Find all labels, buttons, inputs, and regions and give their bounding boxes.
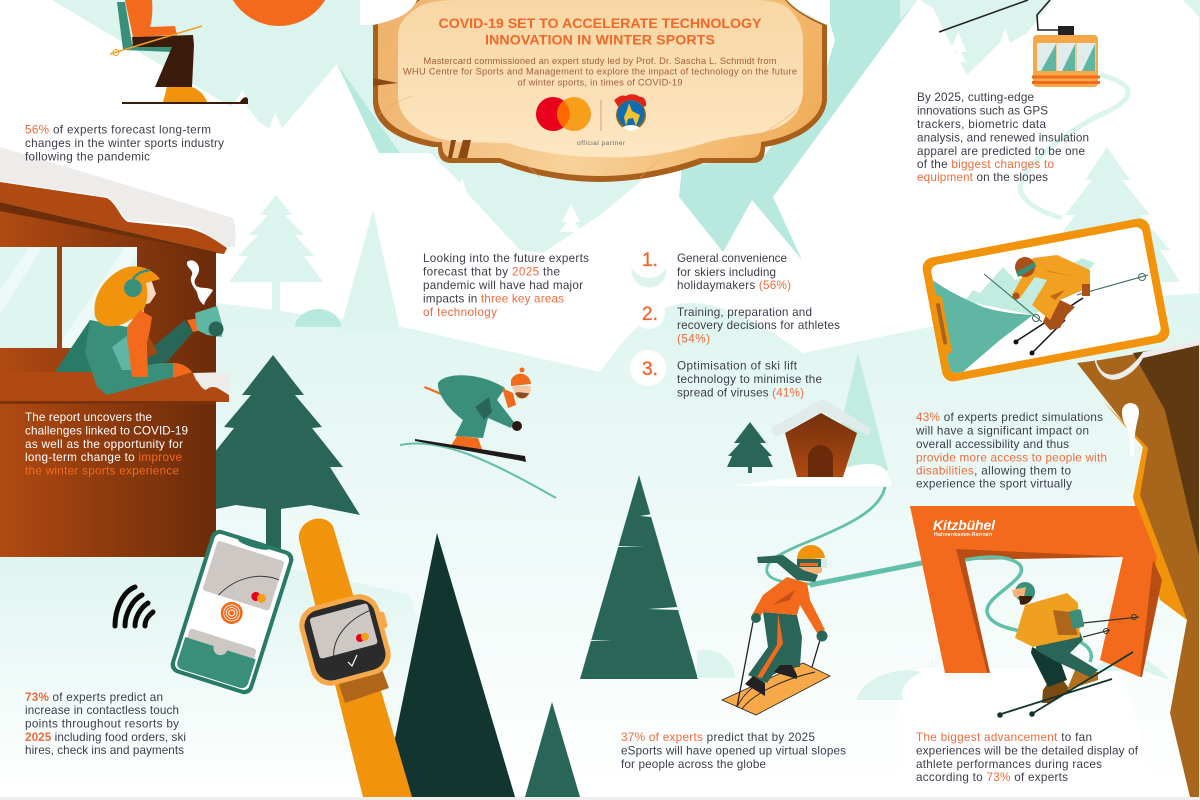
skier in phone: [984, 255, 1148, 356]
ski track upper right: [1020, 75, 1128, 218]
balcony: [0, 372, 230, 404]
start gate: [910, 506, 1162, 677]
dark green cone tree: [580, 475, 698, 679]
item 2: (54%): [677, 332, 710, 346]
item 1: 1.: [642, 250, 658, 271]
ski trails: [767, 487, 922, 585]
text: by 2025 equipment: apparel are predicted to be one: [917, 145, 1085, 158]
plaque intro text: [403, 56, 797, 88]
sun: [225, 0, 333, 26]
text: report uncovers: challenges linked to COVID-19: [25, 424, 188, 438]
text: 73% contactless: hires, check ins and payments: [25, 744, 184, 757]
cabin: [0, 147, 236, 557]
light mint tree upper right: [1030, 147, 1180, 282]
text: looking into the future: impacts in three key areas: [423, 292, 564, 306]
background: mountains: [52, 0, 1200, 335]
big dark pine tree: [383, 533, 515, 797]
item 2: [633, 297, 840, 346]
plaque title: INNOVATION IN WINTER SPORTS: [485, 32, 715, 48]
text: report uncovers: The report uncovers the: [25, 411, 152, 424]
small dark teal tree: [525, 702, 580, 797]
esports skier with VR headset: [722, 545, 830, 715]
text: looking into the future: Looking into the future experts: [423, 252, 589, 265]
title plaque: [360, 0, 830, 182]
plaque title: [438, 16, 762, 48]
item 3: technology to minimise the: [677, 373, 822, 386]
text: 73% contactless: 2025 including food orders, ski: [25, 731, 186, 744]
text: 56% of experts: following the pandemic: [25, 150, 150, 164]
text: report uncovers: long-term change to improve: [25, 451, 182, 464]
text: by 2025 equipment: equipment on the slopes: [917, 171, 1048, 184]
ski trail through gate: [965, 557, 1091, 662]
text: looking into the future: of technology: [423, 306, 497, 319]
text: 37% eSports: 37% of experts predict that by 2025: [621, 731, 815, 744]
item 3: Optimisation of ski lift: [677, 360, 798, 372]
text: biggest advancement: athlete performances during races: [916, 758, 1102, 771]
text: 43% simulations: overall accessibility and thus: [916, 438, 1069, 451]
item 2: Training, preparation and: [677, 306, 812, 319]
woman with mug: [55, 266, 224, 395]
text: looking into the future: [423, 252, 589, 319]
text: 43% simulations: experience the sport virtually: [916, 478, 1072, 490]
numbered list: three key areas: [629, 238, 840, 400]
text: 37% eSports: eSports will have opened up virtual slopes: [621, 744, 846, 758]
item 3: [630, 350, 822, 400]
text: 73% contactless: 73% of experts predict an: [25, 691, 163, 704]
smartphone with payment card: [168, 528, 296, 696]
contactless icon: [115, 587, 153, 626]
text: by 2025 equipment: By 2025, cutting-edge: [917, 91, 1034, 104]
item 2: recovery decisions for athletes: [677, 319, 840, 332]
plaque intro text: of winter sports, in times of COVID-19: [518, 78, 682, 88]
text: 73% contactless: [25, 691, 186, 757]
Mastercard logo: [536, 97, 591, 131]
steam: [187, 260, 213, 305]
brown rock cliff: [1077, 340, 1200, 797]
cable car: [939, 0, 1100, 87]
Kitzbuhel logo: Kitzbühel: [933, 517, 996, 533]
text: 43% simulations: will have a significant impact on: [915, 424, 1089, 438]
plaque intro text: WHU Centre for Sports and Management to explore the impact of technology on the future: [403, 66, 797, 76]
text: 73% contactless: points throughout resorts by: [25, 718, 179, 730]
text: 73% contactless: increase in contactless touch: [25, 704, 179, 717]
text: biggest advancement: [916, 731, 1139, 784]
text: biggest advancement: according to 73% of experts: [916, 771, 1068, 784]
text: 43% simulations: [915, 411, 1107, 490]
Kitzbuhel logo: Hahnenkamm-Rennen: [934, 532, 992, 538]
small pine tree: [727, 422, 773, 473]
cabin windows: [0, 247, 137, 348]
snow mound and hut: [735, 400, 892, 486]
fingerprint button: [218, 599, 246, 627]
text: 56% of experts: [25, 124, 224, 164]
ski club badge: [614, 94, 646, 131]
gate skier: [997, 582, 1139, 718]
text: 43% simulations: disabilities, allowing them to: [916, 464, 1071, 478]
light mint tree behind cabin: [229, 195, 323, 312]
text: 56% of experts: 56% of experts forecast long-term: [25, 124, 211, 136]
text: 37% eSports: for people across the globe: [621, 758, 766, 771]
smartwatch: [295, 519, 412, 797]
item 1: holidaymakers (56%): [677, 279, 791, 292]
official partner label: official partner: [577, 140, 626, 147]
text: by 2025 equipment: innovations such as GPS: [917, 104, 1048, 118]
text: by 2025 equipment: trackers, biometric data: [917, 118, 1046, 131]
dark green pine tree: [186, 355, 360, 560]
text: biggest advancement: The biggest advancement to fan: [916, 731, 1092, 744]
text: report uncovers: the winter sports experience: [25, 464, 179, 478]
snow mounds: [697, 650, 1170, 700]
item 3: spread of viruses (41%): [677, 386, 804, 400]
item 1: for skiers including: [677, 266, 776, 279]
text: biggest advancement: experiences will be the detailed display of: [916, 744, 1139, 758]
right snow mound: [905, 676, 1130, 800]
mint mound near cabin: [295, 309, 341, 327]
plaque title: COVID-19 SET TO ACCELERATE TECHNOLOGY: [438, 16, 762, 32]
item 2: 2.: [642, 304, 658, 325]
text: 43% simulations: 43% of experts predict simulations: [916, 411, 1103, 424]
item 1: General convenience: [677, 252, 787, 265]
text: by 2025 equipment: [917, 91, 1089, 184]
phone with downhill skier: [920, 217, 1171, 385]
text: looking into the future: pandemic will have had major: [423, 279, 583, 292]
chairlift skier: [110, 0, 248, 104]
text: looking into the future: forecast that by 2025 the: [423, 266, 560, 278]
text: 56% of experts: changes in the winter sports industry: [25, 137, 224, 150]
light cone tree by hut: [830, 353, 888, 470]
text: 37% eSports: [621, 731, 846, 771]
item 3: 3.: [642, 359, 658, 380]
text: 43% simulations: provide more access to people with: [916, 452, 1107, 464]
text: by 2025 equipment: of the biggest changes to: [917, 158, 1054, 171]
text: by 2025 equipment: analysis, and renewed insulation: [917, 132, 1089, 144]
background: snowy hills: [0, 293, 1200, 800]
text: report uncovers: as well as the opportunity for: [25, 438, 183, 451]
text: report uncovers: [25, 411, 188, 478]
plaque intro text: Mastercard commissioned an expert study led by Prof. Dr. Sascha L. Schmidt from: [424, 56, 777, 66]
downhill skier with beanie: [400, 368, 556, 498]
item 1: [629, 238, 791, 292]
light mint cone tree: [340, 210, 400, 330]
